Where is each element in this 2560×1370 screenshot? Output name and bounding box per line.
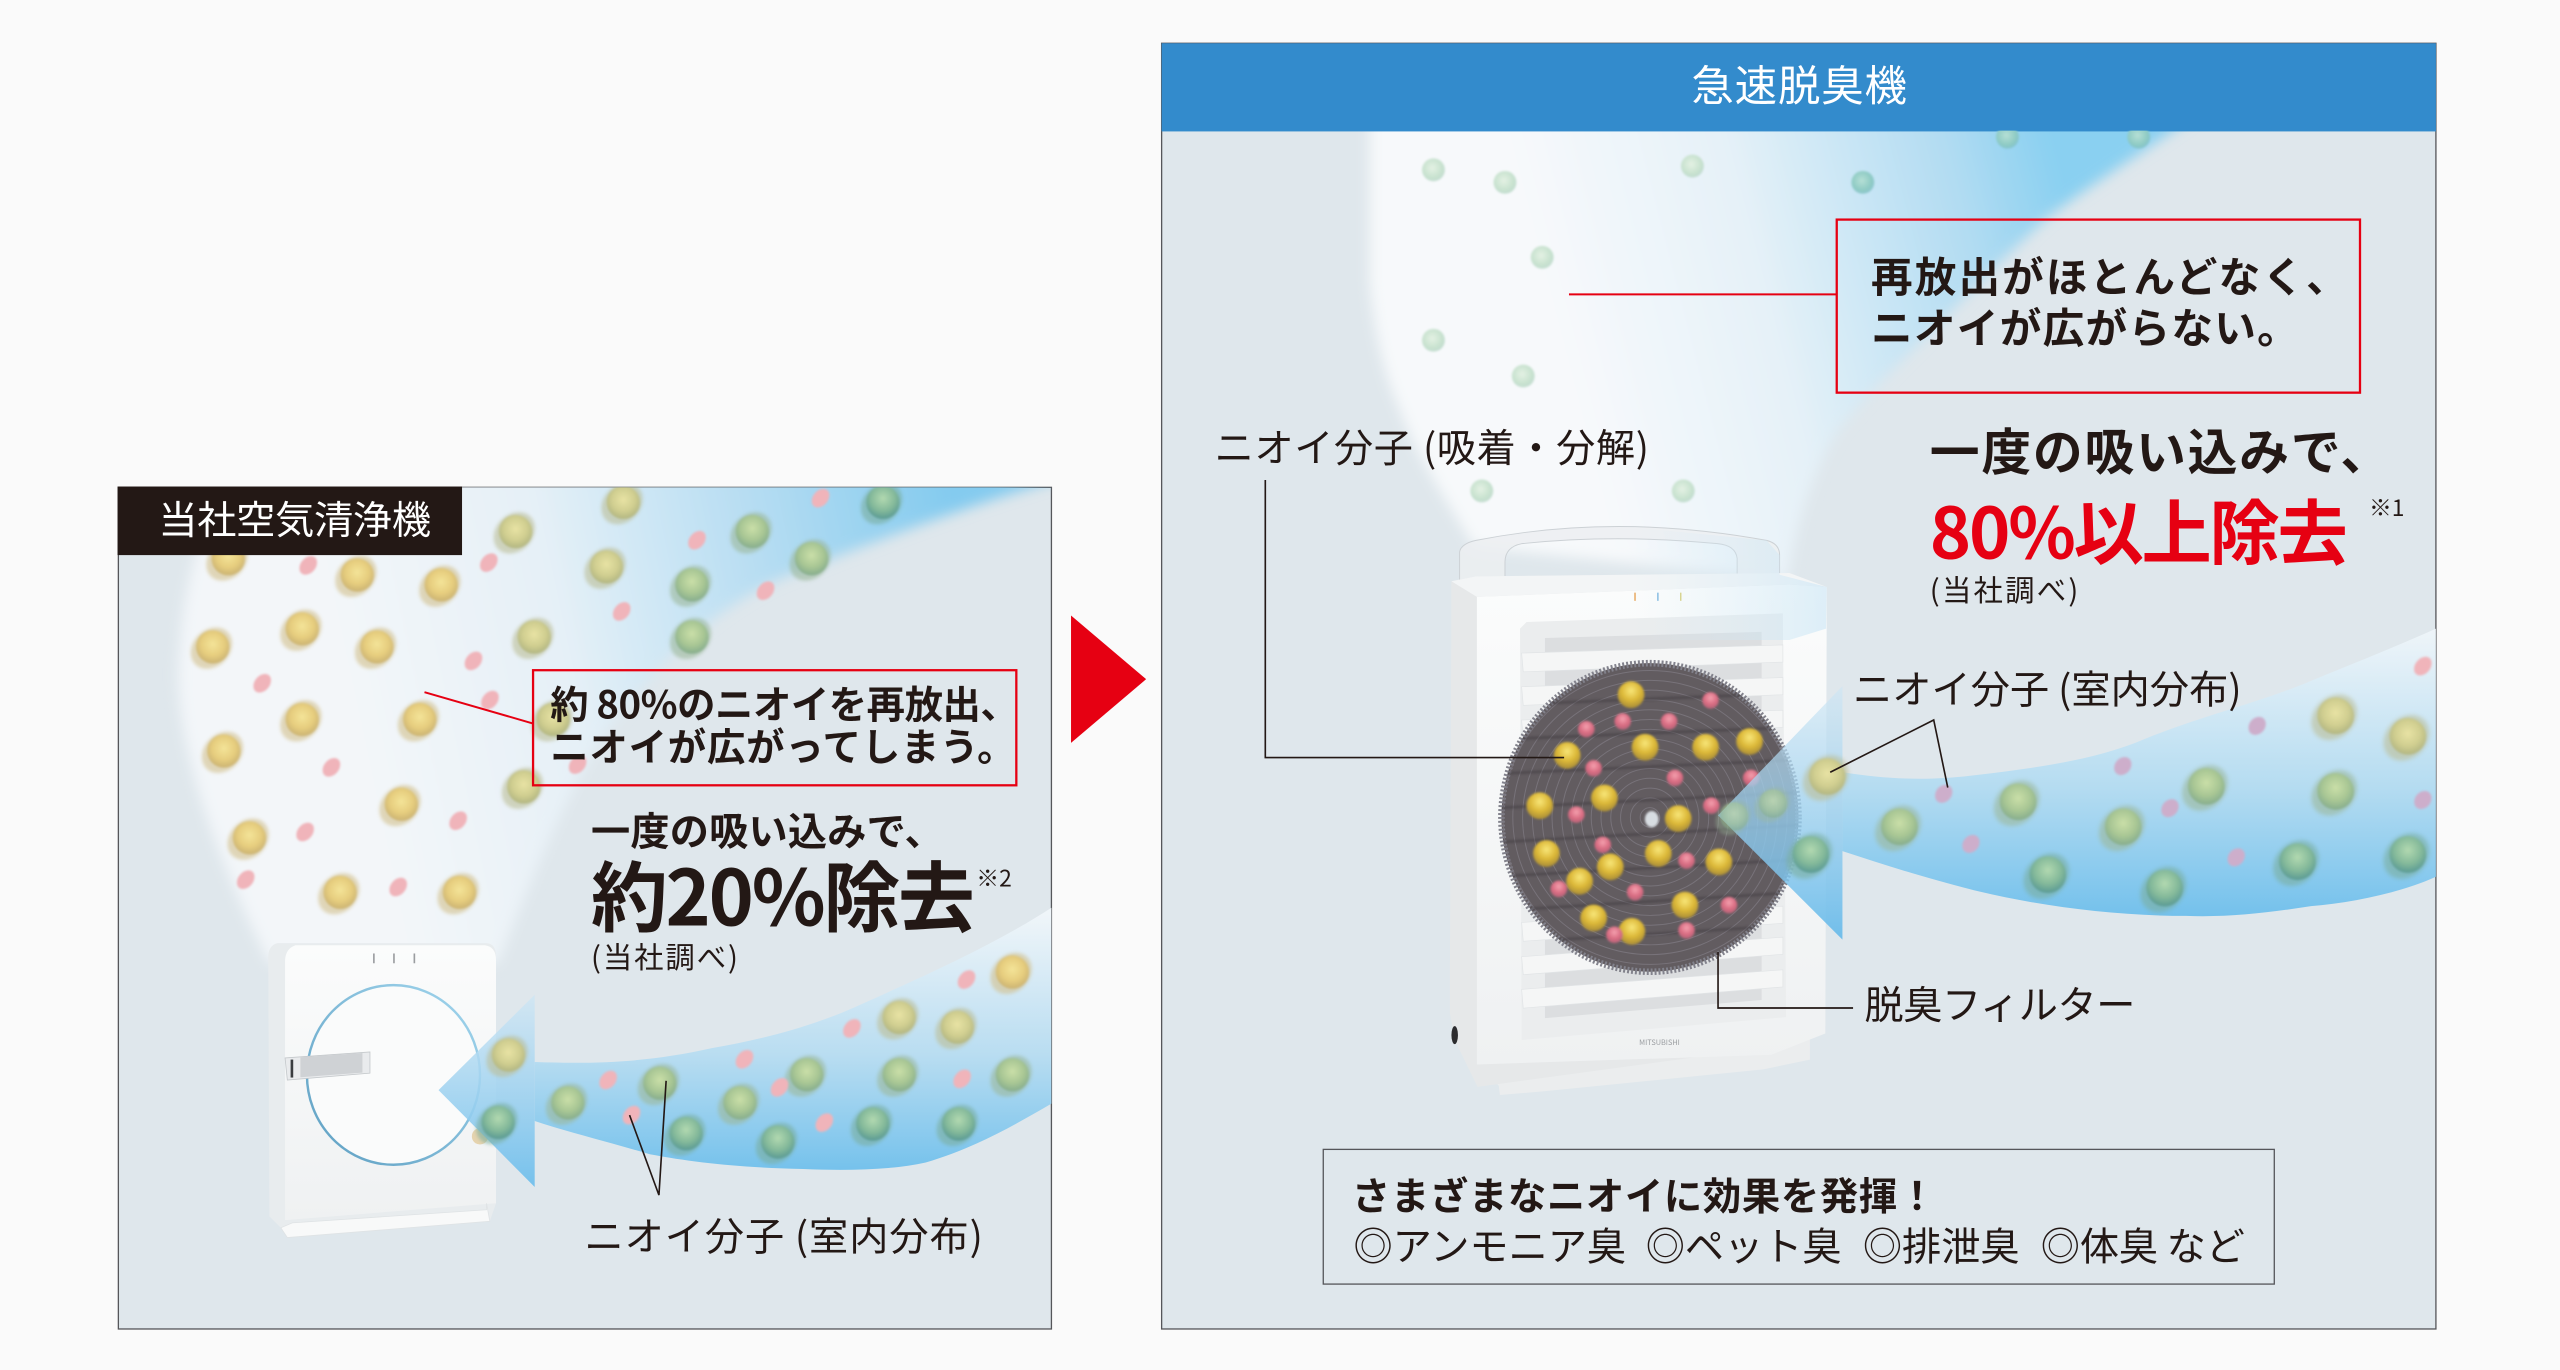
header: rapid deodorizer [1162,43,2436,131]
header: rapid deodorizer: 急速脱臭機 [1691,53,1907,114]
deodorizing filter [1494,663,1812,972]
captured molecules on filter [1526,681,1763,945]
callout: re-release: 約 80%のニオイを再放出、 [550,675,1019,730]
box: effective odor types: ◎体臭 など [2041,1216,2245,1272]
label: room odor molecules with leader lines: ニオイ分子 (室内分布) [1853,660,2242,716]
result: about 20% removal [591,802,1012,977]
incoming odor air band [1842,629,2436,916]
glow washing over device top [1633,527,1827,640]
result: about 20% removal: (当社調べ) [591,935,738,977]
label: odor molecules with leader lines: ニオイ分子 (室内分布) [584,1207,983,1263]
label: adsorbed and decomposed molecules: ニオイ分子 (吸着・分解) [1215,418,1649,474]
box: effective odor types: さまざまなニオイに効果を発揮！ [1352,1167,1936,1222]
box: effective odor types [1323,1149,2274,1284]
result: about 20% removal: 約20%除去 [591,838,975,949]
panel background [1162,43,2436,1329]
result: about 20% removal: ※2 [976,860,1012,894]
label: deodorizing filter with leader line [1718,952,2136,1031]
callout: almost no re-release: ニオイが広がらない。 [1871,295,2299,355]
label: current purifier: 当社空気清浄機 [158,490,431,546]
result: over 80% removal [1930,413,2405,610]
panel: current air purifier [118,473,1078,1329]
result: over 80% removal: 一度の吸い込みで、 [1930,413,2390,485]
label: adsorbed and decomposed molecules [1215,418,1649,758]
box: effective odor types: ◎ペット臭 [1646,1216,1842,1272]
icon: air purifier device [268,943,496,1238]
panel background [118,487,1051,1329]
label: odor molecules with leader lines [584,1081,983,1263]
odor molecules in room [1708,653,2438,921]
device feet [1463,1020,1810,1095]
icon: deodorizer device: MITSUBISHI [1639,1037,1680,1048]
callout: re-release [424,670,1019,785]
box: effective odor types: ◎排泄臭 [1863,1216,2020,1272]
incoming air arrow [1718,686,1842,940]
upper odor molecules, re-released [182,475,911,923]
box: effective odor types: ◎アンモニア臭 [1353,1216,1626,1272]
device grille [1520,613,1786,1040]
incoming odor air band [535,908,1051,1170]
label: deodorizing filter with leader line: 脱臭フィルター [1864,975,2136,1031]
callout: almost no re-release [1569,220,2360,393]
icon: deodorizer device [1450,527,1827,1095]
arrow: comparison direction [1071,616,1146,743]
air flow glow rising from purifier [179,473,1078,963]
result: over 80% removal: ※1 [2369,489,2405,523]
panel: rapid deodorizer [1162,43,2438,1329]
label: current purifier [118,487,462,555]
lower odor molecules in room [468,944,1040,1172]
callout: re-release: ニオイが広がってしまう。 [550,718,1016,773]
result: over 80% removal: (当社調べ) [1930,568,2078,610]
device handle [1460,527,1780,583]
result: over 80% removal: 80%以上除去 [1930,478,2348,579]
callout: almost no re-release: 再放出がほとんどなく、 [1871,244,2348,304]
incoming air arrow [439,995,535,1187]
result: about 20% removal: 一度の吸い込みで、 [591,802,944,858]
air flow glow rising from deodorizer [1370,114,2196,580]
device body [1450,573,1827,1087]
label: room odor molecules with leader lines [1830,660,2242,788]
upper clean molecules [1422,126,2150,502]
